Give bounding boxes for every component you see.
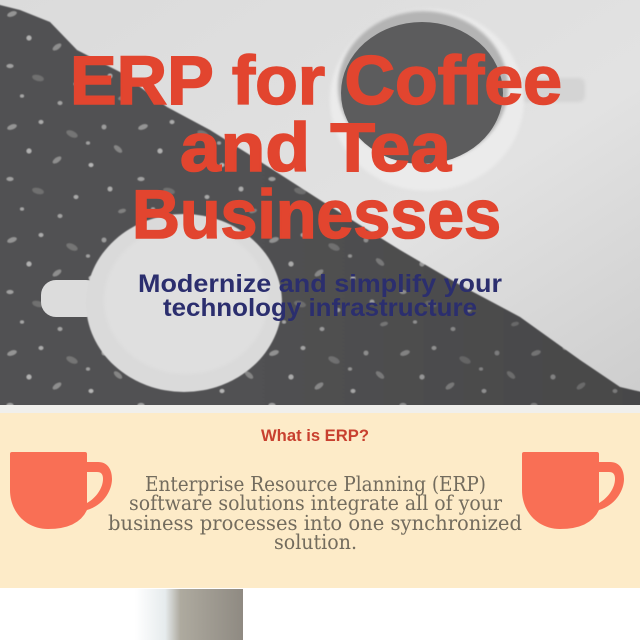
bottom empty cup [41, 214, 282, 392]
hero photo background [0, 0, 640, 415]
hero title: and Tea [180, 109, 452, 186]
divider strip [0, 405, 640, 413]
top coffee cup [330, 9, 585, 191]
hero subtitle: Modernize and simplify your [138, 270, 502, 298]
hero title: ERP for Coffee [70, 42, 562, 119]
icon: right mug [522, 452, 624, 529]
heading: what is ERP: What is ERP? [261, 426, 369, 445]
body text: solution. [274, 530, 357, 554]
body text: business processes into one synchronized [108, 511, 522, 535]
body text: Enterprise Resource Planning (ERP) [145, 472, 486, 496]
body text [108, 472, 522, 554]
hero title: Businesses [132, 176, 501, 253]
body text: software solutions integrate all of your [129, 491, 502, 515]
hero subtitle: technology infrastructure [163, 294, 477, 322]
icon: left mug [10, 452, 112, 529]
coffee beans pile [0, 2, 640, 415]
next section photo fragment [135, 589, 243, 640]
hero subtitle [138, 270, 502, 322]
hero title [70, 42, 562, 253]
panel: what is ERP [0, 413, 640, 588]
